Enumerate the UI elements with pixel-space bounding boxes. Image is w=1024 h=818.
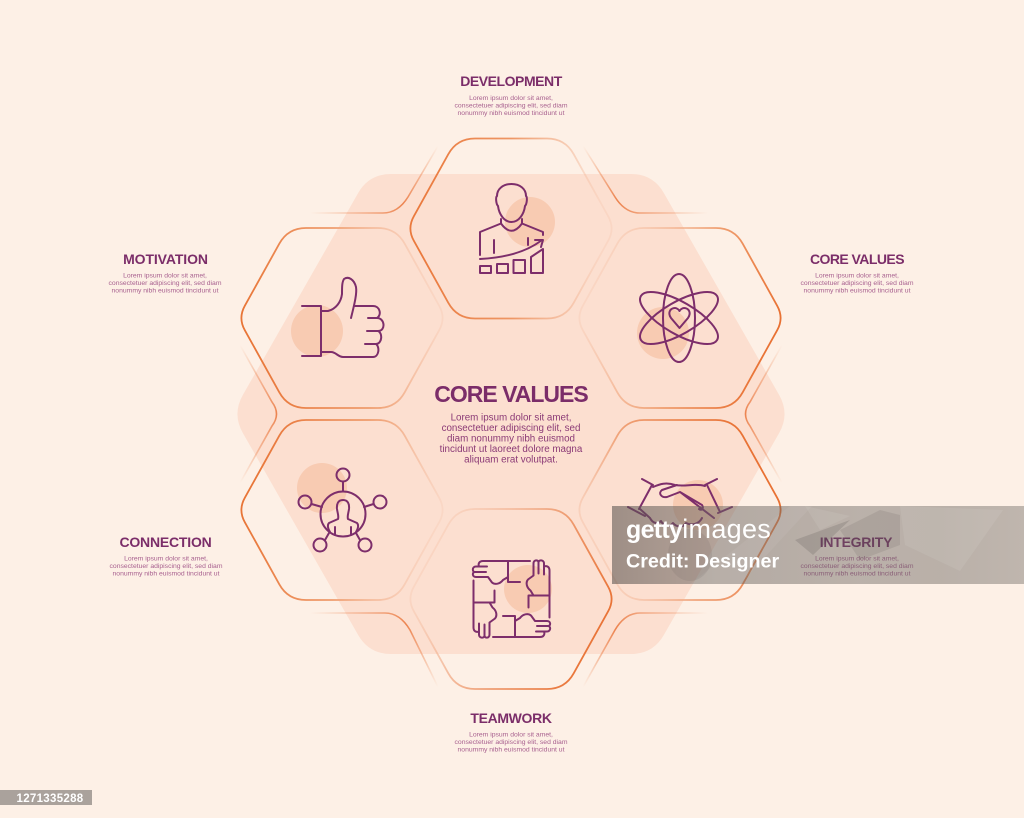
text: central description: consectetuer adipiscing elit, sed bbox=[442, 423, 580, 434]
text: integrity description: nonummy nibh euismod tincidunt ut bbox=[804, 570, 911, 578]
text: integrity description: consectetuer adipiscing elit, sed diam bbox=[801, 563, 914, 570]
watermark band bbox=[612, 506, 1024, 584]
panel: motivation hexagon bbox=[241, 228, 443, 408]
icon: person with growth chart bbox=[480, 184, 555, 273]
panel: core values hexagon bbox=[579, 228, 781, 408]
icon: thumbs up bbox=[291, 278, 384, 357]
heading: core values right: CORE VALUES bbox=[810, 251, 904, 267]
image id label bbox=[0, 790, 92, 805]
text: central description: aliquam erat volutpat. bbox=[464, 454, 558, 466]
text: connection description: consectetuer adipiscing elit, sed diam bbox=[110, 563, 223, 570]
title: core values: CORE VALUES bbox=[434, 381, 588, 407]
text: teamwork description: nonummy nibh euismod tincidunt ut bbox=[458, 746, 565, 754]
icon: four hands teamwork bbox=[473, 560, 552, 638]
text: core values description: Lorem ipsum dolor sit amet, bbox=[815, 272, 899, 280]
connector arcs between hexagons bbox=[240, 146, 782, 687]
icon: atom with heart bbox=[633, 274, 725, 362]
text: development description: nonummy nibh euismod tincidunt ut bbox=[458, 110, 565, 117]
text: central description: diam nonummy nibh euismod bbox=[447, 434, 575, 444]
text: teamwork description: consectetuer adipiscing elit, sed diam bbox=[455, 739, 568, 746]
icon: handshake bbox=[628, 479, 732, 530]
watermark: credit: Credit: Designer bbox=[626, 550, 779, 572]
heading: development: DEVELOPMENT bbox=[460, 73, 563, 89]
text: development description: consectetuer adipiscing elit, sed diam bbox=[455, 102, 568, 110]
panel: connection hexagon bbox=[241, 420, 443, 600]
text: teamwork description: Lorem ipsum dolor sit amet, bbox=[469, 732, 553, 738]
heading: connection: CONNECTION bbox=[119, 534, 212, 550]
text: central description: Lorem ipsum dolor sit amet, bbox=[451, 412, 571, 424]
watermark: getty images: gettyimages bbox=[626, 514, 771, 544]
text: development description: Lorem ipsum dolor sit amet, bbox=[469, 95, 553, 102]
icon: people network bbox=[297, 463, 386, 552]
heading: motivation: MOTIVATION bbox=[123, 251, 208, 267]
text: motivation description: nonummy nibh euismod tincidunt ut bbox=[112, 288, 219, 294]
panel: integrity hexagon bbox=[579, 420, 781, 600]
large central hexagon bbox=[237, 174, 785, 654]
text: central description: tincidunt ut laoreet dolore magna bbox=[440, 444, 583, 455]
text: motivation description: consectetuer adipiscing elit, sed diam bbox=[109, 280, 222, 287]
text: motivation description: Lorem ipsum dolor sit amet, bbox=[123, 272, 207, 280]
panel: development hexagon bbox=[410, 138, 612, 318]
image id label: 1271335288 bbox=[17, 793, 84, 805]
text: integrity description: Lorem ipsum dolor sit amet, bbox=[815, 556, 899, 562]
text: core values description: consectetuer adipiscing elit, sed diam bbox=[801, 280, 914, 287]
panel: teamwork hexagon bbox=[410, 509, 612, 689]
text: core values description: nonummy nibh euismod tincidunt ut bbox=[804, 288, 911, 294]
heading: integrity: INTEGRITY bbox=[820, 534, 893, 550]
text: connection description: Lorem ipsum dolor sit amet, bbox=[124, 556, 208, 562]
text: connection description: nonummy nibh euismod tincidunt ut bbox=[113, 570, 220, 578]
heading: teamwork: TEAMWORK bbox=[470, 710, 552, 726]
